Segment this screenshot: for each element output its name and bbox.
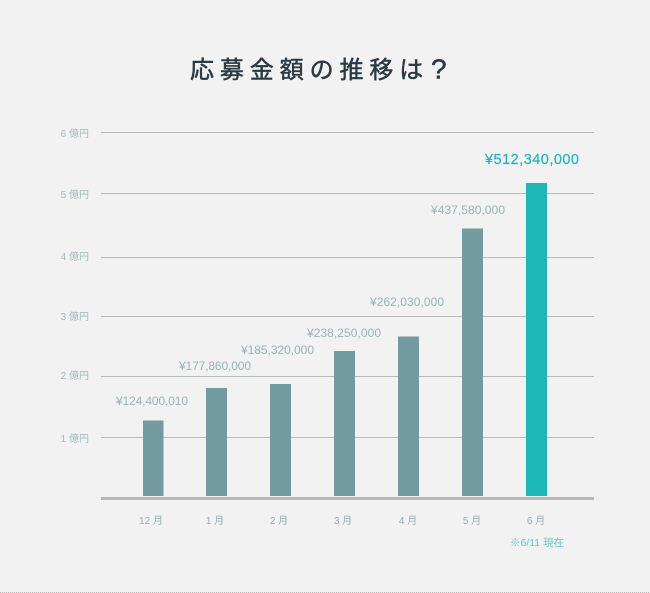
y-axis labels: 5 億円 [61, 188, 89, 201]
month labels: 4 月 [399, 515, 417, 527]
y-axis labels: 1 億円 [61, 432, 89, 445]
value labels: ¥185,320,000 [240, 343, 314, 357]
value labels [115, 203, 505, 408]
footnote: ※6/11 現在 [510, 537, 564, 549]
y-axis labels [61, 127, 89, 445]
value labels: ¥238,250,000 [306, 326, 381, 340]
x axis [101, 497, 594, 500]
value labels: ¥177,860,000 [178, 359, 251, 373]
month labels: 2 月 [270, 515, 288, 527]
month labels: 12 月 [139, 515, 163, 527]
y-axis labels: 6 億円 [61, 127, 89, 140]
value labels: ¥124,400,010 [115, 394, 188, 408]
highlighted value label: ¥512,340,000 [484, 152, 579, 168]
value labels: ¥437,580,000 [430, 203, 505, 217]
month labels [139, 515, 545, 527]
bars [143, 183, 547, 496]
title: 応募金額の推移は [190, 50, 429, 85]
month labels: 3 月 [334, 515, 352, 527]
y-axis labels: 4 億円 [61, 250, 89, 263]
month labels: 5 月 [463, 515, 481, 527]
y-axis labels: 3 億円 [61, 310, 89, 323]
month labels: 1 月 [206, 515, 224, 527]
title: ? [431, 54, 452, 84]
month labels: 6 月 [527, 515, 545, 527]
value labels: ¥262,030,000 [369, 295, 444, 309]
y-axis labels: 2 億円 [61, 369, 89, 382]
